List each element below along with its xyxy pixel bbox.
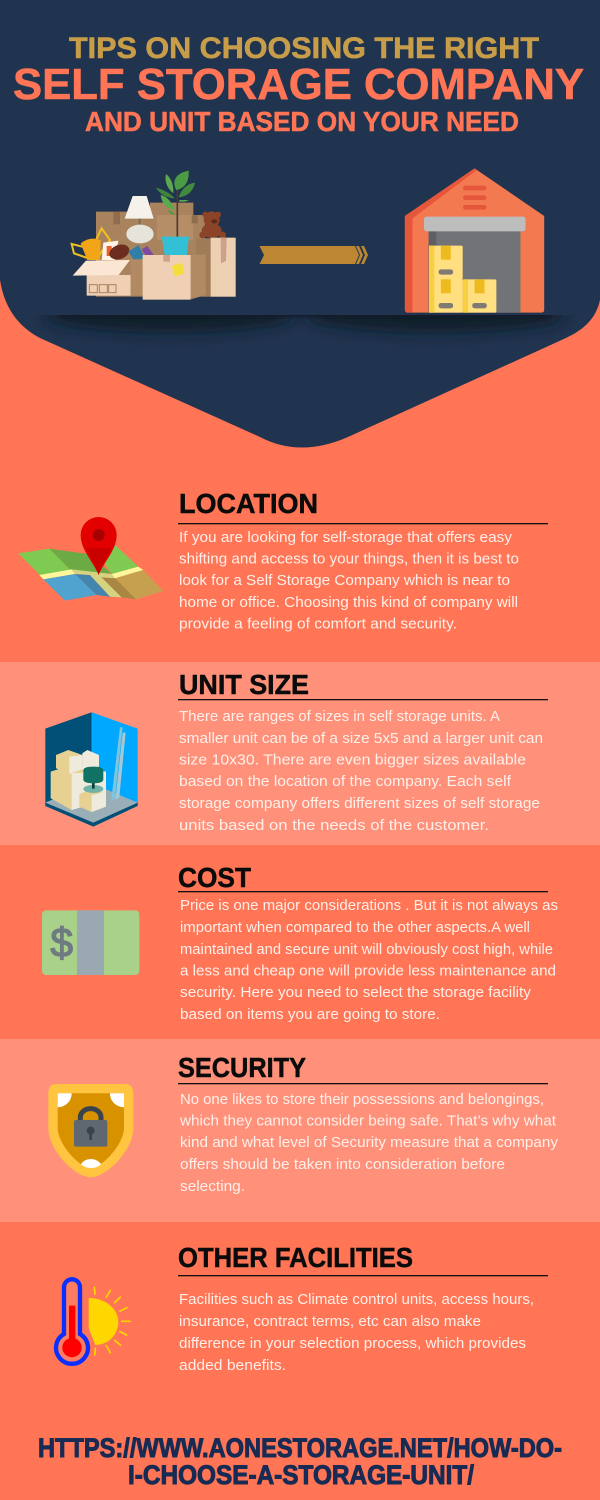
panel: cost	[0, 845, 600, 1039]
icon: map with pin	[18, 517, 163, 601]
heading: security: SECURITY	[178, 1052, 306, 1083]
body text: cost: a less and cheap one will provide less maintenance and	[180, 962, 556, 980]
body text: cost: security. Here you need to select the storage facility	[180, 984, 531, 1001]
body text: location: shifting and access to your things, then it is best to	[179, 550, 519, 568]
footer url	[38, 1433, 562, 1490]
body text: cost	[180, 897, 558, 1023]
body text: unit size: size 10x30. There are even bigger sizes available	[179, 752, 526, 768]
body text: security: kind and what level of Security measure that a company	[180, 1134, 558, 1151]
arrow	[260, 246, 368, 264]
body text: security	[179, 1091, 558, 1195]
illustration: storage unit building	[405, 168, 544, 313]
body text: unit size: units based on the needs of the customer.	[179, 817, 489, 834]
icon: banknote: $	[50, 919, 73, 965]
body text: security: offers should be taken into consideration before	[180, 1156, 505, 1173]
title line 2: SELF STORAGE COMPANY	[13, 60, 584, 109]
book and football	[102, 241, 155, 262]
icon: thermometer and sun	[56, 1279, 130, 1364]
plant	[156, 171, 195, 237]
body text: unit size: storage company offers different sizes of self storage	[179, 795, 540, 812]
footer url: I-CHOOSE-A-STORAGE-UNIT/	[128, 1460, 474, 1490]
body text: location: look for a Self Storage Company which is near to	[179, 572, 510, 589]
trophy	[72, 228, 110, 260]
body text: security: which they cannot consider being safe. That’s why what	[179, 1112, 557, 1130]
body text: unit size: based on the location of the company. Each self	[179, 773, 512, 790]
icon: storage room	[45, 712, 138, 827]
title line 1: TIPS ON CHOOSING THE RIGHT	[69, 32, 539, 65]
icon: shield with padlock	[48, 1084, 133, 1177]
body text: unit size: smaller unit can be of a size 5x5 and a larger unit can	[179, 730, 543, 747]
heading: unit size: UNIT SIZE	[179, 669, 309, 700]
title	[13, 32, 584, 137]
body text: cost: based on items you are going to store.	[180, 1006, 440, 1023]
body text: other facilities: Facilities such as Climate control units, access hours,	[179, 1291, 534, 1308]
body text: other facilities: insurance, contract terms, etc can also make	[179, 1313, 481, 1330]
heading: cost: COST	[178, 862, 251, 893]
panel: location	[0, 450, 600, 662]
title line 3: AND UNIT BASED ON YOUR NEED	[85, 106, 519, 137]
body text: security: selecting.	[180, 1178, 245, 1195]
body text: unit size	[179, 708, 543, 834]
stacked crates	[429, 246, 496, 313]
heading: location: LOCATION	[179, 488, 318, 519]
teddy bear	[199, 211, 226, 238]
body text: cost: Price is one major considerations . But it is not always as	[180, 897, 558, 914]
icon: banknote	[42, 910, 139, 975]
lamp	[125, 196, 154, 243]
shelf shadow	[41, 315, 569, 338]
front cartons	[143, 238, 236, 300]
body text: other facilities: difference in your selection process, which provides	[179, 1335, 526, 1352]
body text: other facilities: added benefits.	[179, 1357, 286, 1374]
panel: unit size	[0, 662, 600, 845]
open carton	[73, 259, 143, 296]
body text: cost: maintained and secure unit will obviously cost high, while	[180, 941, 553, 958]
panel: other facilities	[0, 1222, 600, 1420]
body text: other facilities	[179, 1291, 534, 1374]
body text: location: home or office. Choosing this kind of company will	[179, 594, 518, 611]
header banner	[0, 0, 600, 448]
heading: other facilities: OTHER FACILITIES	[178, 1242, 413, 1273]
body text: unit size: There are ranges of sizes in self storage units. A	[179, 708, 500, 725]
body text: location: If you are looking for self-storage that offers easy	[179, 529, 513, 546]
body text: security: No one likes to store their possessions and belongings,	[180, 1091, 544, 1108]
body text: location: provide a feeling of comfort and security.	[179, 616, 457, 632]
body text: location	[179, 529, 519, 632]
plant pot	[162, 237, 189, 257]
body text: cost: important when compared to the other aspects.A well	[180, 919, 530, 936]
panel: security	[0, 1039, 600, 1222]
illustration: moving boxes and belongings	[72, 171, 236, 300]
